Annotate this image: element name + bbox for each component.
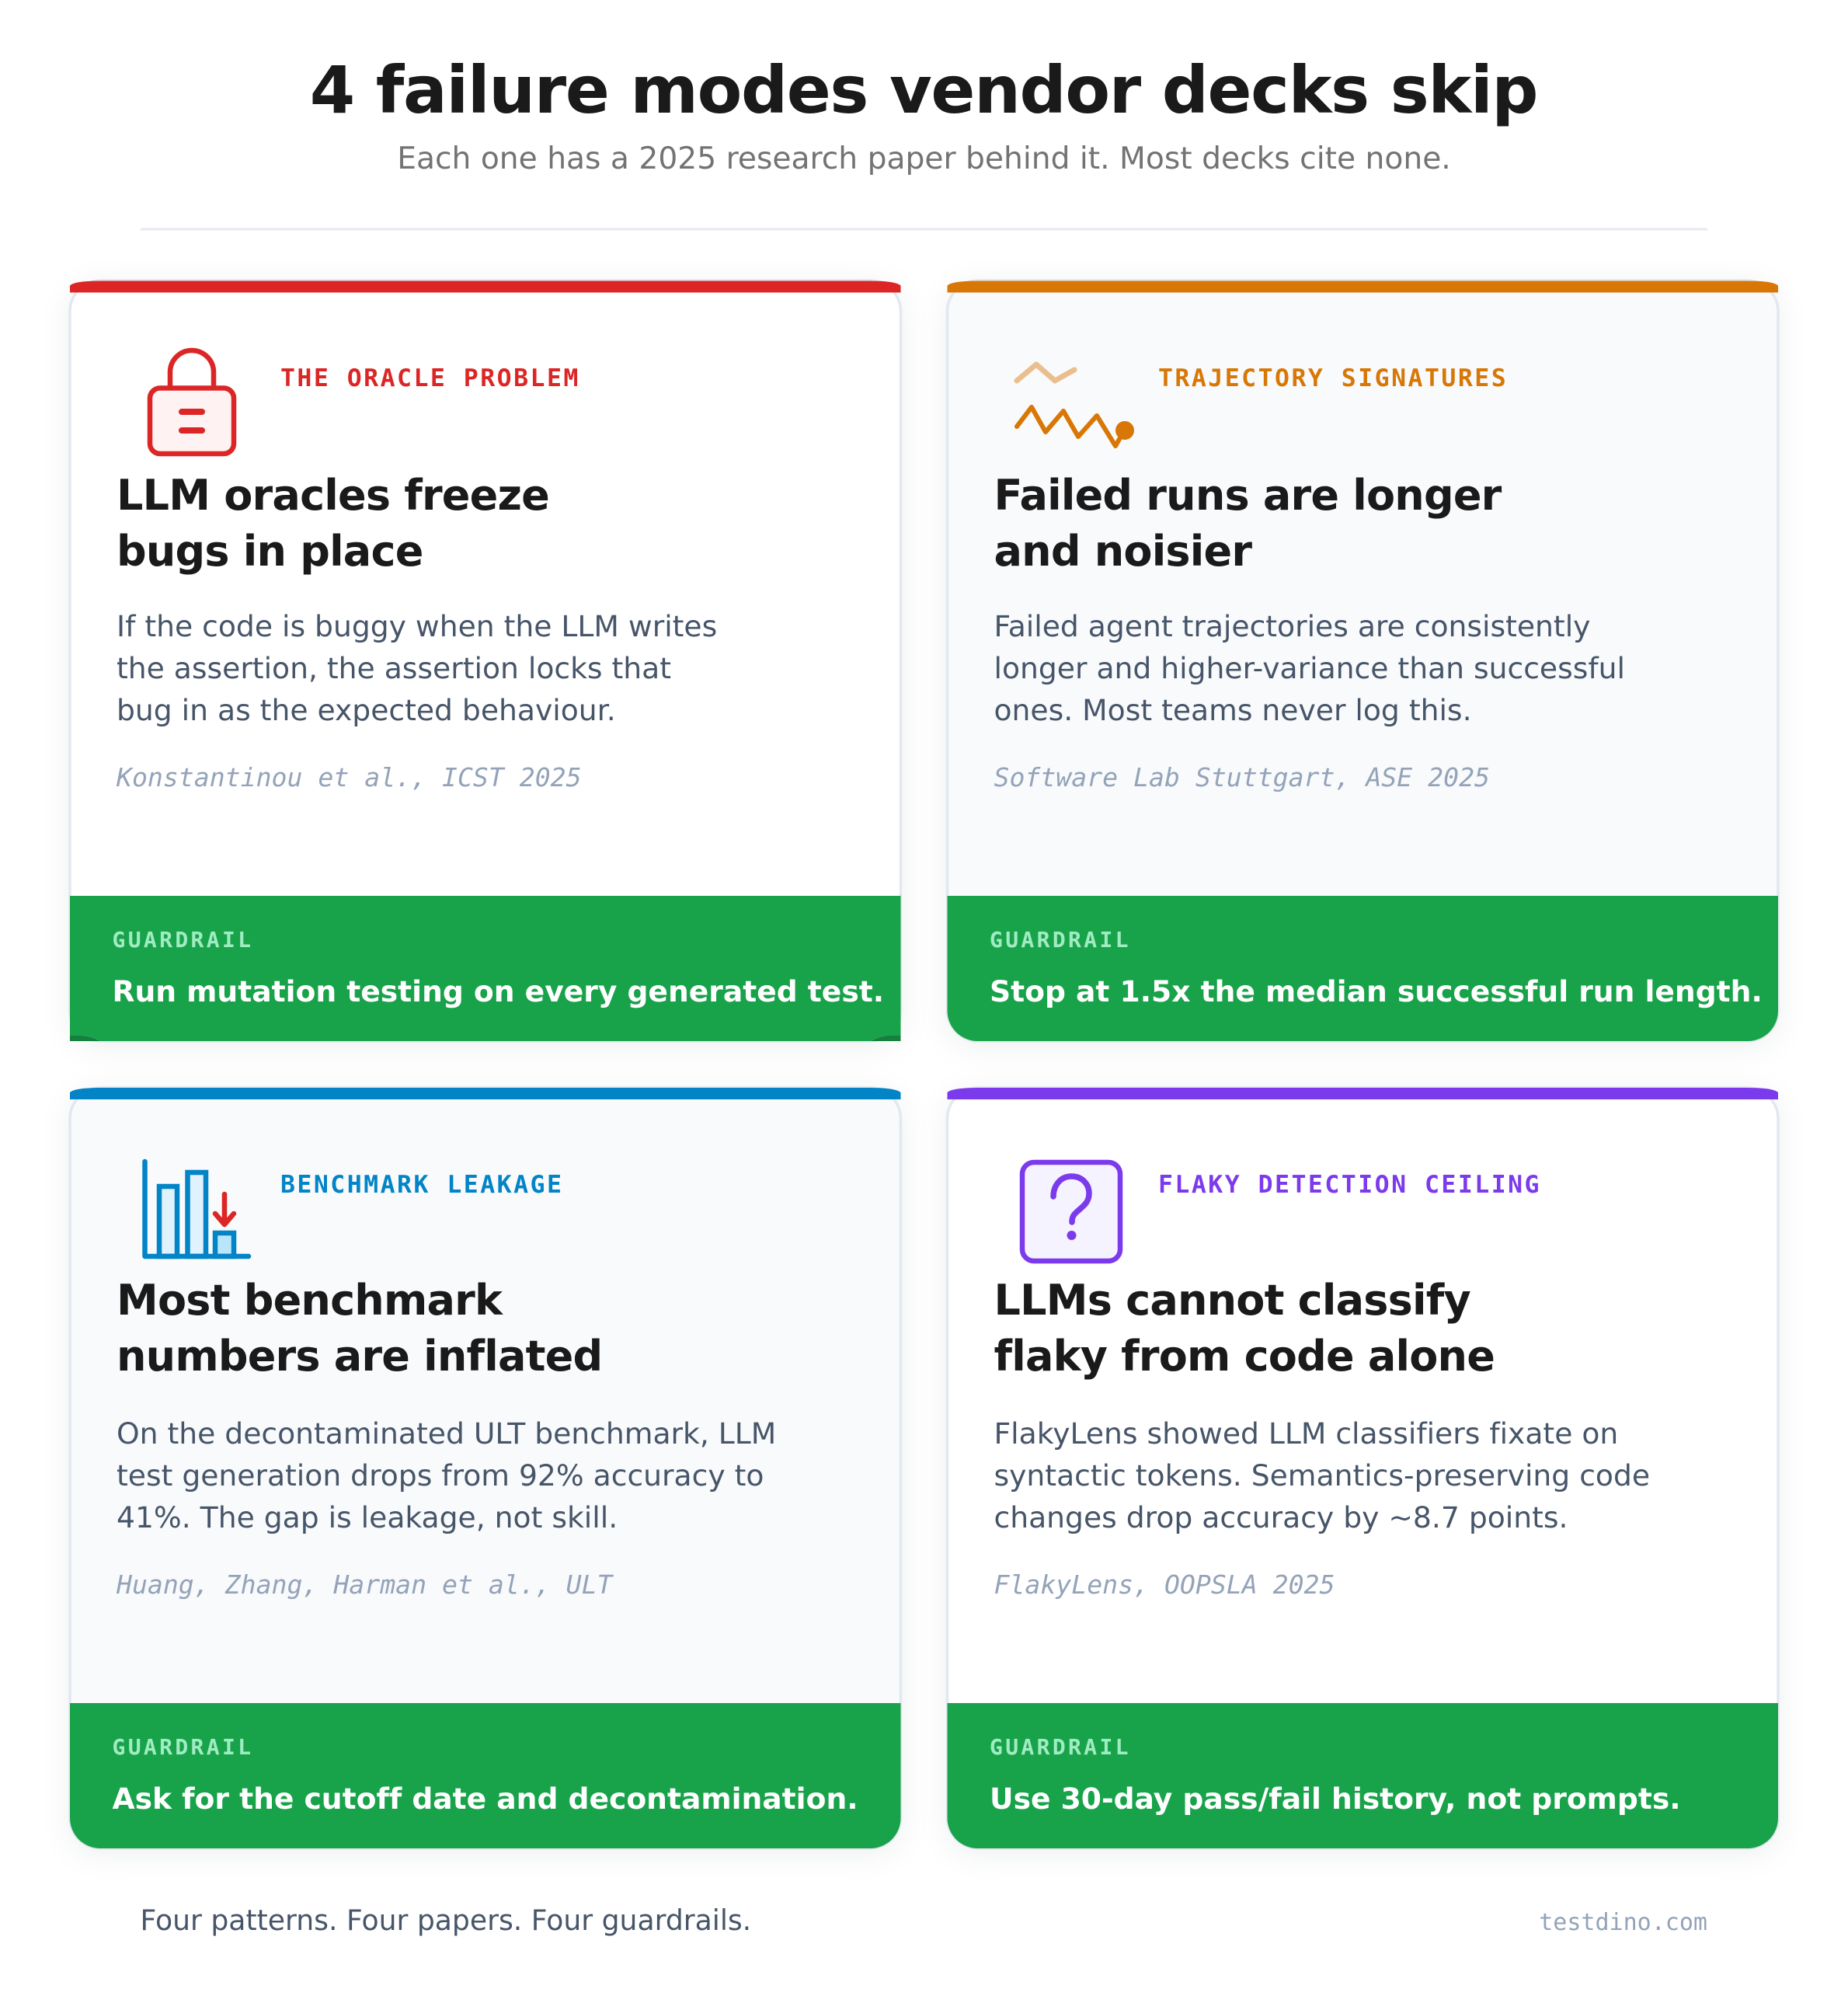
accent bar: purple [948,1088,1778,1099]
guardrail text: Stop at 1.5x the median successful run length. [990,974,1763,1008]
body text: bug in as the expected behaviour. [117,693,616,727]
accent bar: blue [70,1088,901,1099]
guardrail label: GUARDRAIL [990,927,1131,953]
body text: test generation drops from 92% accuracy to [117,1458,764,1493]
citation: Konstantinou et al., ICST 2025 [116,762,582,792]
heading: Most benchmark [117,1276,503,1325]
heading: and noisier [994,527,1252,576]
body text: longer and higher-variance than successful [994,651,1625,685]
heading: LLM oracles freeze [117,471,549,520]
panel: the oracle problem [70,280,901,1041]
body text: syntactic tokens. Semantics-preserving code [994,1458,1650,1493]
citation: Software Lab Stuttgart, ASE 2025 [994,762,1490,792]
accent bar: orange [948,281,1778,292]
guardrail text: Use 30-day pass/fail history, not prompts. [990,1782,1681,1816]
body text: FlakyLens showed LLM classifiers fixate on [994,1416,1618,1451]
heading: Failed runs are longer [994,471,1502,520]
title: 4 failure modes vendor decks skip [310,52,1537,128]
icon: falling bar chart [144,1162,249,1256]
subtitle: Each one has a 2025 research paper behind it. Most decks cite none. [397,141,1451,176]
guardrail text: Run mutation testing on every generated test. [112,974,884,1008]
body text: On the decontaminated ULT benchmark, LLM [117,1416,776,1451]
citation: Huang, Zhang, Harman et al., ULT [116,1569,614,1600]
guardrail label: GUARDRAIL [112,1734,253,1760]
heading: numbers are inflated [117,1332,602,1381]
guardrail band [948,1703,1778,1848]
heading: bugs in place [117,527,423,576]
heading: LLMs cannot classify [994,1276,1470,1325]
body text: ones. Most teams never log this. [994,693,1472,727]
panel: benchmark leakage [70,1088,901,1848]
body text: 41%. The gap is leakage, not skill. [117,1500,618,1534]
citation: FlakyLens, OOPSLA 2025 [994,1569,1335,1600]
body text: changes drop accuracy by ~8.7 points. [994,1500,1568,1534]
panel: flaky detection ceiling [948,1088,1778,1848]
panel: trajectory signatures [948,280,1778,1041]
accent bar: red [70,281,901,292]
icon: padlock [150,350,234,454]
footer site: testdino.com [1539,1909,1707,1936]
icon: trajectories [1017,364,1134,446]
body text: the assertion, the assertion locks that [117,651,671,685]
body text: If the code is buggy when the LLM writes [117,609,717,643]
icon: question mark box [1022,1162,1120,1261]
label: trajectory signatures: TRAJECTORY SIGNATURES [1158,364,1508,392]
heading: flaky from code alone [994,1332,1495,1381]
guardrail band [70,1703,901,1848]
label: flaky detection ceiling: FLAKY DETECTION CEILING [1158,1171,1541,1199]
guardrail band [948,896,1778,1041]
label: benchmark leakage: BENCHMARK LEAKAGE [280,1171,563,1199]
footer tagline: Four patterns. Four papers. Four guardrails. [140,1904,751,1937]
guardrail label: GUARDRAIL [112,927,253,953]
guardrail label: GUARDRAIL [990,1734,1131,1760]
guardrail band [70,896,901,1041]
body text: Failed agent trajectories are consistently [994,609,1590,643]
guardrail text: Ask for the cutoff date and decontamination. [112,1782,858,1816]
label: the oracle problem: THE ORACLE PROBLEM [280,364,580,392]
